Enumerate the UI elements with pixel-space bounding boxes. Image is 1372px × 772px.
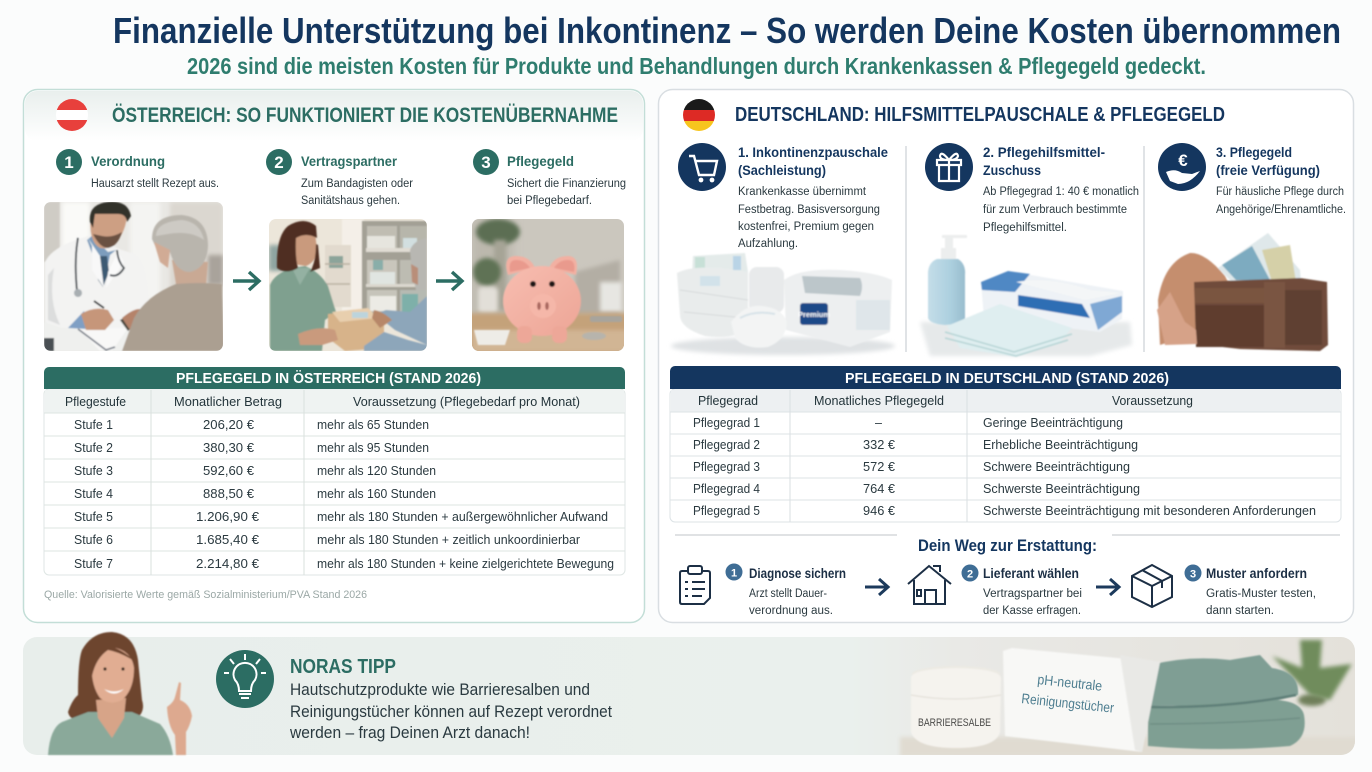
column 1: Inkontinenzpauschale: Krankenkasse übernimmt xyxy=(738,186,867,198)
arrow xyxy=(1096,579,1119,595)
step 1: Verordnung: 1 xyxy=(64,153,74,172)
row: Stufe 1: mehr als 65 Stunden xyxy=(317,418,429,432)
row: Pflegegrad 3: Pflegegrad 3 xyxy=(693,460,760,474)
table: Pflegegeld Österreich: Pflegestufe xyxy=(65,395,126,409)
tip text xyxy=(289,656,612,742)
row: Stufe 7 xyxy=(74,557,614,571)
row: Stufe 5: Stufe 5 xyxy=(74,510,113,524)
row: Pflegegrad 4 xyxy=(693,482,1140,496)
step 3: Pflegegeld: 3 xyxy=(481,153,491,172)
image: towels, cream and wipes xyxy=(900,640,1360,757)
row: Stufe 2: Stufe 2 xyxy=(74,441,113,455)
row: Stufe 7: 2.214,80 € xyxy=(196,557,259,571)
step 3: Pflegegeld: Sichert die Finanzierung xyxy=(507,178,626,190)
column 2: Pflegehilfsmittel-Zuschuss: Ab Pflegegrad 1: 40 € monatlich xyxy=(983,186,1139,198)
row: Stufe 2 xyxy=(74,441,429,455)
row: Stufe 5: mehr als 180 Stunden + außergewöhnlicher Aufwand xyxy=(317,510,608,524)
step: Muster anfordern: dann starten. xyxy=(1206,605,1274,617)
step 3: Pflegegeld: Pflegegeld xyxy=(507,153,574,169)
table: Pflegegeld Deutschland: PFLEGEGELD IN DEUTSCHLAND (STAND 2026) xyxy=(845,371,1169,387)
step 1: Verordnung: Hausarzt stellt Rezept aus. xyxy=(91,178,219,190)
row: Stufe 6 xyxy=(74,533,580,547)
row: Pflegegrad 5: Schwerste Beeinträchtigung mit besonderen Anforderungen xyxy=(983,504,1316,518)
banner: Noras Tipp xyxy=(23,632,1360,757)
column 1: Inkontinenzpauschale: Festbetrag. Basisversorgung xyxy=(738,204,880,216)
tip text: werden – frag Deinen Arzt danach! xyxy=(289,724,530,742)
column 3: Pflegegeld xyxy=(1158,143,1346,216)
step 3: Pflegegeld: bei Pflegebedarf. xyxy=(507,195,592,207)
row: Stufe 2: mehr als 95 Stunden xyxy=(317,441,429,455)
row: Stufe 1: Stufe 1 xyxy=(74,418,113,432)
photo: piggy bank xyxy=(472,219,624,351)
step: Diagnose sichern xyxy=(726,564,846,617)
heading: Deutschland: DEUTSCHLAND: HILFSMITTELPAUSCHALE & PFLEGEGELD xyxy=(735,103,1225,126)
icon: shopping cart xyxy=(678,143,726,191)
row: Stufe 4 xyxy=(74,487,436,501)
arrow xyxy=(233,272,259,290)
icon: German flag xyxy=(683,99,715,132)
row: Stufe 4: 888,50 € xyxy=(203,487,254,501)
photo: handover in medical supply store xyxy=(269,219,427,351)
step 2: Vertragspartner: Vertragspartner xyxy=(301,153,397,169)
step: Muster anfordern: 3 xyxy=(1190,568,1196,580)
row: Stufe 3: 592,60 € xyxy=(203,464,254,478)
table: Pflegegeld Österreich: Voraussetzung (Pflegebedarf pro Monat) xyxy=(353,395,580,409)
step: Lieferant wählen: der Kasse erfragen. xyxy=(983,605,1081,617)
row: Stufe 4: Stufe 4 xyxy=(74,487,113,501)
row: Stufe 7: mehr als 180 Stunden + keine zielgerichtete Bewegung xyxy=(317,557,614,571)
row: Pflegegrad 2: 332 € xyxy=(863,438,895,452)
row: Stufe 1: 206,20 € xyxy=(203,418,254,432)
step: Lieferant wählen xyxy=(962,564,1082,617)
step: Muster anfordern: Gratis-Muster testen, xyxy=(1206,588,1316,600)
row: Pflegegrad 2: Erhebliche Beeinträchtigung xyxy=(983,438,1138,452)
image: towels, cream and wipes: pH-neutrale xyxy=(1037,671,1103,694)
image: incontinence products: Premium xyxy=(798,310,830,319)
icon: euro in hand: € xyxy=(1178,151,1188,170)
row: Stufe 6: 1.685,40 € xyxy=(196,533,259,547)
column 3: Pflegegeld: Für häusliche Pflege durch xyxy=(1216,186,1344,198)
row: Stufe 6: mehr als 180 Stunden + zeitlich unkoordinierbar xyxy=(317,533,580,547)
source note: Quelle: Valorisierte Werte gemäß Sozialministerium/PVA Stand 2026 xyxy=(44,589,367,601)
step: Diagnose sichern: Arzt stellt Dauer- xyxy=(749,588,827,600)
step: Muster anfordern: Muster anfordern xyxy=(1206,566,1307,581)
row: Stufe 5 xyxy=(74,510,608,524)
icon: light bulb xyxy=(216,650,274,708)
row: Stufe 3: Stufe 3 xyxy=(74,464,113,478)
step 1: Verordnung: Verordnung xyxy=(91,153,165,169)
row: Stufe 3 xyxy=(74,464,436,478)
row: Pflegegrad 5: 946 € xyxy=(863,504,895,518)
row: Stufe 4: mehr als 160 Stunden xyxy=(317,487,436,501)
icon: clipboard xyxy=(680,566,710,604)
row: Pflegegrad 4: Pflegegrad 4 xyxy=(693,482,760,496)
table: Pflegegeld Deutschland: Voraussetzung xyxy=(1112,394,1193,408)
row: Pflegegrad 2: Pflegegrad 2 xyxy=(693,438,760,452)
column 2: Pflegehilfsmittel-Zuschuss: für zum Verbrauch bestimmte xyxy=(983,204,1127,216)
table: Pflegegeld Deutschland: Pflegegrad xyxy=(698,394,758,408)
heading: Dein Weg zur Erstattung: Dein Weg zur Erstattung: xyxy=(918,537,1097,555)
row: Pflegegrad 5 xyxy=(693,504,1316,518)
row: Pflegegrad 1: – xyxy=(875,416,882,430)
tip text: NORAS TIPP xyxy=(290,656,396,678)
row: Pflegegrad 4: 764 € xyxy=(863,482,895,496)
row: Stufe 7: Stufe 7 xyxy=(74,557,113,571)
image: towels, cream and wipes: Reinigungstücher xyxy=(1021,690,1115,716)
step 2: Vertragspartner xyxy=(266,149,413,207)
image: incontinence products xyxy=(671,253,895,355)
table: Pflegegeld Deutschland: Monatliches Pflegegeld xyxy=(814,394,944,408)
step: Diagnose sichern: verordnung aus. xyxy=(749,605,833,617)
step 2: Vertragspartner: Zum Bandagisten oder xyxy=(301,178,413,190)
image: bottle, gloves box and pads xyxy=(920,235,1132,357)
icon: euro in hand xyxy=(1158,143,1206,191)
column 2: Pflegehilfsmittel-Zuschuss: 2. Pflegehilfsmittel- xyxy=(983,144,1105,160)
heading: Österreich: ÖSTERREICH: SO FUNKTIONIERT DIE KOSTENÜBERNAHME xyxy=(112,104,618,127)
column 2: Pflegehilfsmittel-Zuschuss: Pflegehilfsmittel. xyxy=(983,222,1067,234)
image: wallet with money xyxy=(1157,233,1328,351)
row: Pflegegrad 1: Geringe Beeinträchtigung xyxy=(983,416,1123,430)
row: Pflegegrad 4: Schwerste Beeinträchtigung xyxy=(983,482,1140,496)
step 3: Pflegegeld xyxy=(473,149,626,207)
panel: Deutschland xyxy=(658,90,1354,622)
step: Muster anfordern xyxy=(1184,564,1316,617)
table: Pflegegeld Österreich xyxy=(44,367,625,575)
row: Stufe 2: 380,30 € xyxy=(203,441,254,455)
image: towels, cream and wipes: BARRIERESALBE xyxy=(918,717,991,729)
column 1: Inkontinenzpauschale: 1. Inkontinenzpauschale xyxy=(738,144,888,160)
step: Lieferant wählen: Lieferant wählen xyxy=(983,566,1079,581)
image: Nora pointing upward xyxy=(48,632,192,755)
photo: doctor and patient xyxy=(44,202,224,351)
row: Pflegegrad 3: Schwere Beeinträchtigung xyxy=(983,460,1130,474)
table: Pflegegeld Deutschland xyxy=(670,366,1341,522)
column 1: Inkontinenzpauschale: Aufzahlung. xyxy=(738,238,798,250)
column 1: Inkontinenzpauschale: (Sachleistung) xyxy=(738,162,826,178)
step 2: Vertragspartner: Sanitätshaus gehen. xyxy=(301,195,400,207)
step: Diagnose sichern: 1 xyxy=(731,568,737,580)
step: Lieferant wählen: 2 xyxy=(967,568,973,580)
subtitle: 2026 sind die meisten Kosten für Produkte und Behandlungen durch Krankenkassen & Pflegegeld gedeckt. xyxy=(187,53,1206,79)
tip text: Reinigungstücher können auf Rezept verordnet xyxy=(290,703,612,721)
column 2: Pflegehilfsmittel-Zuschuss xyxy=(925,143,1139,234)
column 3: Pflegegeld: Angehörige/Ehrenamtliche. xyxy=(1216,204,1346,216)
row: Pflegegrad 2 xyxy=(693,438,1138,452)
row: Stufe 3: mehr als 120 Stunden xyxy=(317,464,436,478)
tip text: Hautschutzprodukte wie Barrieresalben und xyxy=(290,681,590,699)
step 1: Verordnung xyxy=(56,149,219,190)
column 1: Inkontinenzpauschale xyxy=(678,143,888,250)
row: Stufe 6: Stufe 6 xyxy=(74,533,113,547)
column 1: Inkontinenzpauschale: kostenfrei, Premium gegen xyxy=(738,221,874,233)
step: Lieferant wählen: Vertragspartner bei xyxy=(983,588,1082,600)
step 2: Vertragspartner: 2 xyxy=(274,153,284,172)
icon: gift xyxy=(925,143,973,191)
row: Pflegegrad 5: Pflegegrad 5 xyxy=(693,504,760,518)
icon: Austrian flag xyxy=(56,99,88,131)
table: Pflegegeld Österreich: PFLEGEGELD IN ÖSTERREICH (STAND 2026) xyxy=(176,370,481,387)
arrow xyxy=(436,272,462,290)
column 3: Pflegegeld: 3. Pflegegeld xyxy=(1216,144,1292,160)
arrow xyxy=(865,579,888,595)
row: Stufe 1 xyxy=(74,418,429,432)
row: Pflegegrad 3: 572 € xyxy=(863,460,895,474)
column 3: Pflegegeld: (freie Verfügung) xyxy=(1216,162,1320,178)
row: Pflegegrad 1 xyxy=(693,416,1123,430)
icon: box xyxy=(1132,565,1172,607)
panel: Österreich xyxy=(24,90,644,622)
table: Pflegegeld Österreich: Monatlicher Betrag xyxy=(174,395,282,409)
row: Stufe 5: 1.206,90 € xyxy=(196,510,259,524)
column 2: Pflegehilfsmittel-Zuschuss: Zuschuss xyxy=(983,162,1041,178)
icon: house xyxy=(908,566,951,604)
step: Diagnose sichern: Diagnose sichern xyxy=(749,566,846,581)
row: Pflegegrad 3 xyxy=(693,460,1130,474)
row: Pflegegrad 1: Pflegegrad 1 xyxy=(693,416,760,430)
